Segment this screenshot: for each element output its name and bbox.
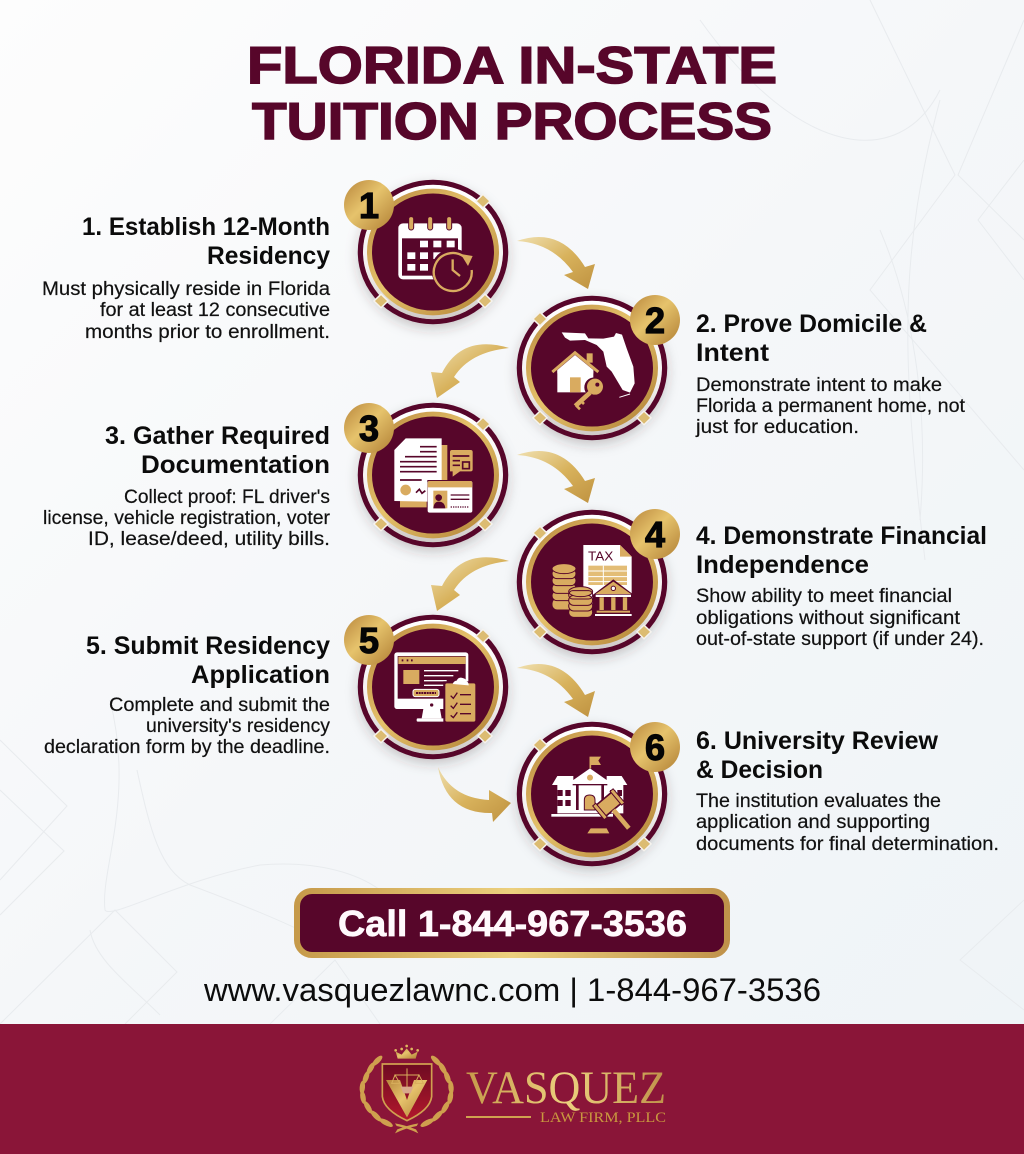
step 6 medallion xyxy=(517,722,680,866)
step 3 text: license, vehicle registration, voter xyxy=(43,508,331,529)
badge 1 xyxy=(344,180,394,230)
arrow 2 to 3 xyxy=(431,344,509,398)
badge 3: 3 xyxy=(359,408,379,449)
step 3 text: Documentation xyxy=(141,451,330,479)
arrow 5 to 6 bottom xyxy=(438,767,511,822)
step 1 text: 1. Establish 12-Month xyxy=(82,213,330,241)
arrow 1 to 2 xyxy=(517,237,595,289)
logo wordmark: VASQUEZ xyxy=(466,1062,666,1114)
icon: university and gavel xyxy=(551,757,639,837)
arrow 4 to 5 xyxy=(431,557,509,611)
step 2 medallion xyxy=(517,295,680,440)
step 5 text: Application xyxy=(191,661,330,689)
step 5 text xyxy=(44,632,330,758)
step 2 text: Florida a permanent home, not xyxy=(696,396,966,417)
step 5 text: 5. Submit Residency xyxy=(86,632,330,660)
step 2 text xyxy=(695,310,966,438)
step 3 text: 3. Gather Required xyxy=(105,422,330,450)
step 4 text: Independence xyxy=(696,551,869,579)
step 2 text: Intent xyxy=(696,339,770,367)
title xyxy=(247,37,777,151)
step 6 text: documents for final determination. xyxy=(696,834,999,855)
badge 4: 4 xyxy=(645,514,665,555)
step 3 text xyxy=(43,422,331,550)
step 4 text: 4. Demonstrate Financial xyxy=(696,522,987,550)
icon: calendar and clock xyxy=(398,217,474,291)
step 6 text: application and supporting xyxy=(696,812,930,833)
step 2 text: 2. Prove Domicile & xyxy=(696,310,927,338)
call to action button xyxy=(297,891,727,955)
arrow 5 to 6 top xyxy=(517,664,595,717)
step 4 text: out-of-state support (if under 24). xyxy=(696,629,984,650)
step 4 text: obligations without significant xyxy=(696,608,961,629)
step 1 text: Must physically reside in Florida xyxy=(42,279,330,300)
step 6 text xyxy=(696,727,999,855)
icon: tax form, coins and bank: TAX xyxy=(588,549,614,564)
badge 4 xyxy=(630,509,680,559)
step 5 text: declaration form by the deadline. xyxy=(44,737,330,758)
badge 5 xyxy=(344,615,394,665)
website and phone: www.vasquezlawnc.com | 1-844-967-3536 xyxy=(203,972,821,1008)
step 4 text xyxy=(696,522,987,650)
badge 1: 1 xyxy=(359,185,379,226)
step 1 medallion xyxy=(344,180,508,324)
badge 2: 2 xyxy=(645,300,665,341)
arrow 3 to 4 xyxy=(517,451,595,503)
logo subtitle: LAW FIRM, PLLC xyxy=(540,1110,666,1126)
logo rule xyxy=(466,1116,531,1118)
icon: tax form, coins and bank xyxy=(552,545,634,618)
law firm logo xyxy=(359,1045,666,1133)
footer band xyxy=(0,1024,1024,1154)
logo emblem xyxy=(359,1045,454,1133)
step 5 medallion xyxy=(344,615,508,759)
step 6 text: & Decision xyxy=(696,756,823,784)
step 6 text: The institution evaluates the xyxy=(696,791,941,812)
badge 2 xyxy=(630,295,680,345)
step 1 text xyxy=(42,213,330,343)
icon: computer and checklist xyxy=(394,652,477,724)
badge 6 xyxy=(630,722,680,772)
step 3 text: ID, lease/deed, utility bills. xyxy=(88,529,330,550)
badge 3 xyxy=(344,403,394,453)
step 3 medallion xyxy=(344,403,508,547)
step 4 text: Show ability to meet financial xyxy=(696,586,952,607)
step 3 text: Collect proof: FL driver's xyxy=(124,487,330,508)
step 1 text: for at least 12 consecutive xyxy=(100,300,330,321)
step 1 text: months prior to enrollment. xyxy=(85,322,330,343)
step 6 text: 6. University Review xyxy=(696,727,939,755)
step 2 text: Demonstrate intent to make xyxy=(696,375,942,396)
icon: documents and ID xyxy=(394,438,473,513)
title: TUITION PROCESS xyxy=(252,93,772,151)
step 2 text: just for education. xyxy=(695,417,859,438)
step 4 medallion xyxy=(517,509,680,654)
step 5 text: Complete and submit the xyxy=(109,695,330,716)
badge 6: 6 xyxy=(645,727,665,768)
title: FLORIDA IN-STATE xyxy=(247,37,777,95)
call to action button: Call 1-844-967-3536 xyxy=(338,903,687,944)
badge 5: 5 xyxy=(359,620,379,661)
icon: Florida with house and key xyxy=(552,332,635,409)
step 5 text: university's residency xyxy=(146,716,330,737)
step 1 text: Residency xyxy=(207,242,330,270)
